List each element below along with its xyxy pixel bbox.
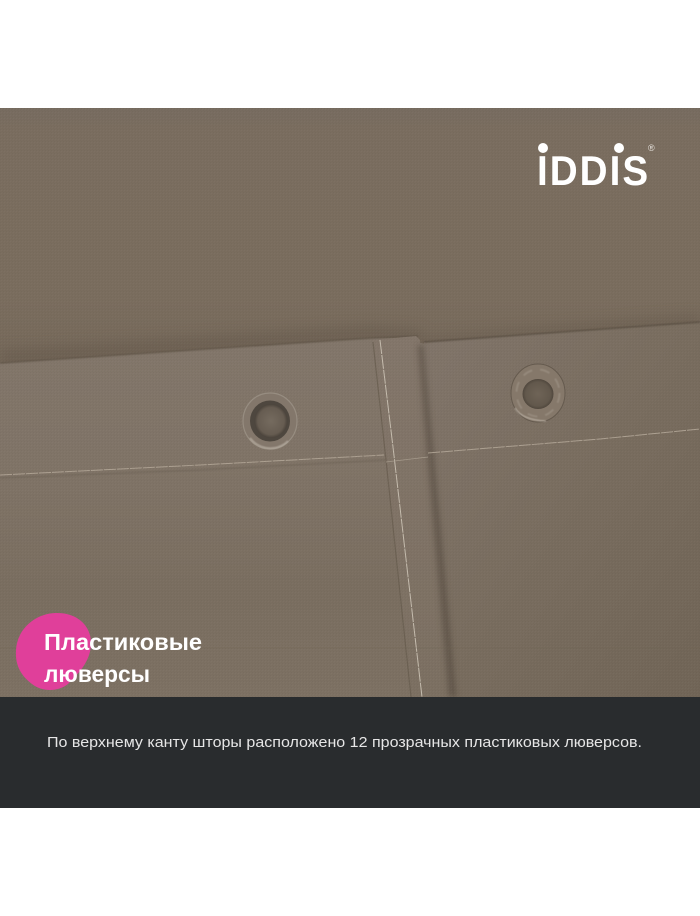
photo: curtain fabric — [0, 108, 700, 697]
grommet left — [243, 393, 297, 449]
horizontal stitches — [0, 429, 700, 648]
dark caption band — [0, 697, 700, 808]
fold shadow above hem — [190, 333, 396, 344]
grommet right — [511, 364, 565, 422]
heading: Пластиковые — [44, 629, 202, 655]
vertical tab — [373, 336, 456, 697]
caption text: По верхнему канту шторы расположено 12 прозрачных пластиковых люверсов. — [47, 734, 642, 751]
logo: IDDIS: ® — [648, 143, 655, 153]
weave texture — [0, 108, 700, 697]
hem edge lines — [0, 322, 700, 363]
heading — [44, 629, 202, 687]
heading: люверсы — [44, 661, 150, 687]
upper fabric — [0, 108, 700, 378]
logo: IDDIS: IDDIS — [537, 146, 650, 194]
right hem panel — [424, 322, 700, 697]
pink accent blob — [16, 613, 91, 690]
left hem panel — [0, 338, 460, 697]
infographic canvas — [0, 108, 700, 808]
